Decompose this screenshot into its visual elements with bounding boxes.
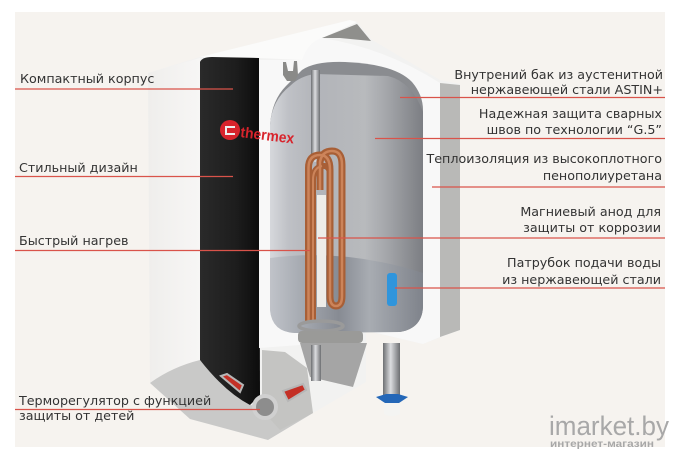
label: thermostat (15, 393, 260, 423)
black front panel (200, 57, 260, 405)
anode rod (311, 70, 320, 162)
white pipe end (384, 403, 400, 416)
label: weld protection: швов по технологии “G.5” (487, 122, 662, 137)
label: weld protection: Надежная защита сварных (479, 106, 662, 121)
label: inlet pipe (395, 255, 665, 288)
watermark: интернет-магазин (550, 438, 654, 450)
grey foam band (440, 83, 460, 337)
label: stylish design: Стильный дизайн (19, 160, 138, 175)
label: insulation (426, 151, 665, 187)
label: inner tank: нержавеющей стали ASTIN+ (471, 82, 663, 97)
water heater illustration (148, 20, 460, 440)
label: insulation: пенополиуретана (543, 168, 662, 183)
magnesium anode (317, 195, 326, 307)
blue water tube (387, 273, 397, 306)
blue collar (376, 394, 408, 403)
thermostat bracket (262, 350, 313, 430)
tank bottom dome (270, 255, 423, 333)
flange (299, 321, 343, 331)
lid notch (322, 24, 371, 41)
label: inner tank: Внутрений бак из аустенитной (454, 67, 663, 82)
flange ring (298, 331, 363, 343)
white foam insulation (259, 38, 440, 348)
tank rim (270, 62, 423, 180)
label: weld protection (375, 106, 665, 138)
label: fast heating: Быстрый нагрев (19, 233, 129, 248)
label: insulation: Теплоизоляция из высокоплотного (426, 151, 662, 166)
thermex logo (220, 120, 296, 148)
nozzle (254, 396, 276, 418)
casing top lid (200, 20, 357, 60)
tank interior (270, 74, 423, 333)
control knob left (221, 374, 243, 392)
casing left side (148, 58, 200, 383)
label: thermostat: Терморегулятор с функцией (18, 393, 211, 408)
thermex logo: thermex (240, 124, 296, 148)
label: inlet pipe: из нержавеющей стали (502, 272, 661, 287)
label: inner tank (400, 67, 665, 98)
water inlet pipe (383, 343, 400, 398)
copper heating element (308, 151, 342, 322)
label: inlet pipe: Патрубок подачи воды (507, 255, 661, 270)
outer casing (148, 20, 460, 440)
block pipe (311, 345, 321, 381)
watermark: imarket.by (549, 411, 669, 441)
top bracket (283, 61, 298, 81)
label: thermostat: защиты от детей (19, 408, 134, 423)
control knob right (283, 384, 306, 401)
casing bottom (150, 360, 313, 440)
label: magnesium anode: Магниевый анод для (520, 204, 661, 219)
label: compact casing: Компактный корпус (20, 71, 154, 86)
label: magnesium anode (318, 204, 665, 238)
label: magnesium anode: защиты от коррозии (523, 220, 661, 235)
lower mounting block (300, 343, 367, 387)
